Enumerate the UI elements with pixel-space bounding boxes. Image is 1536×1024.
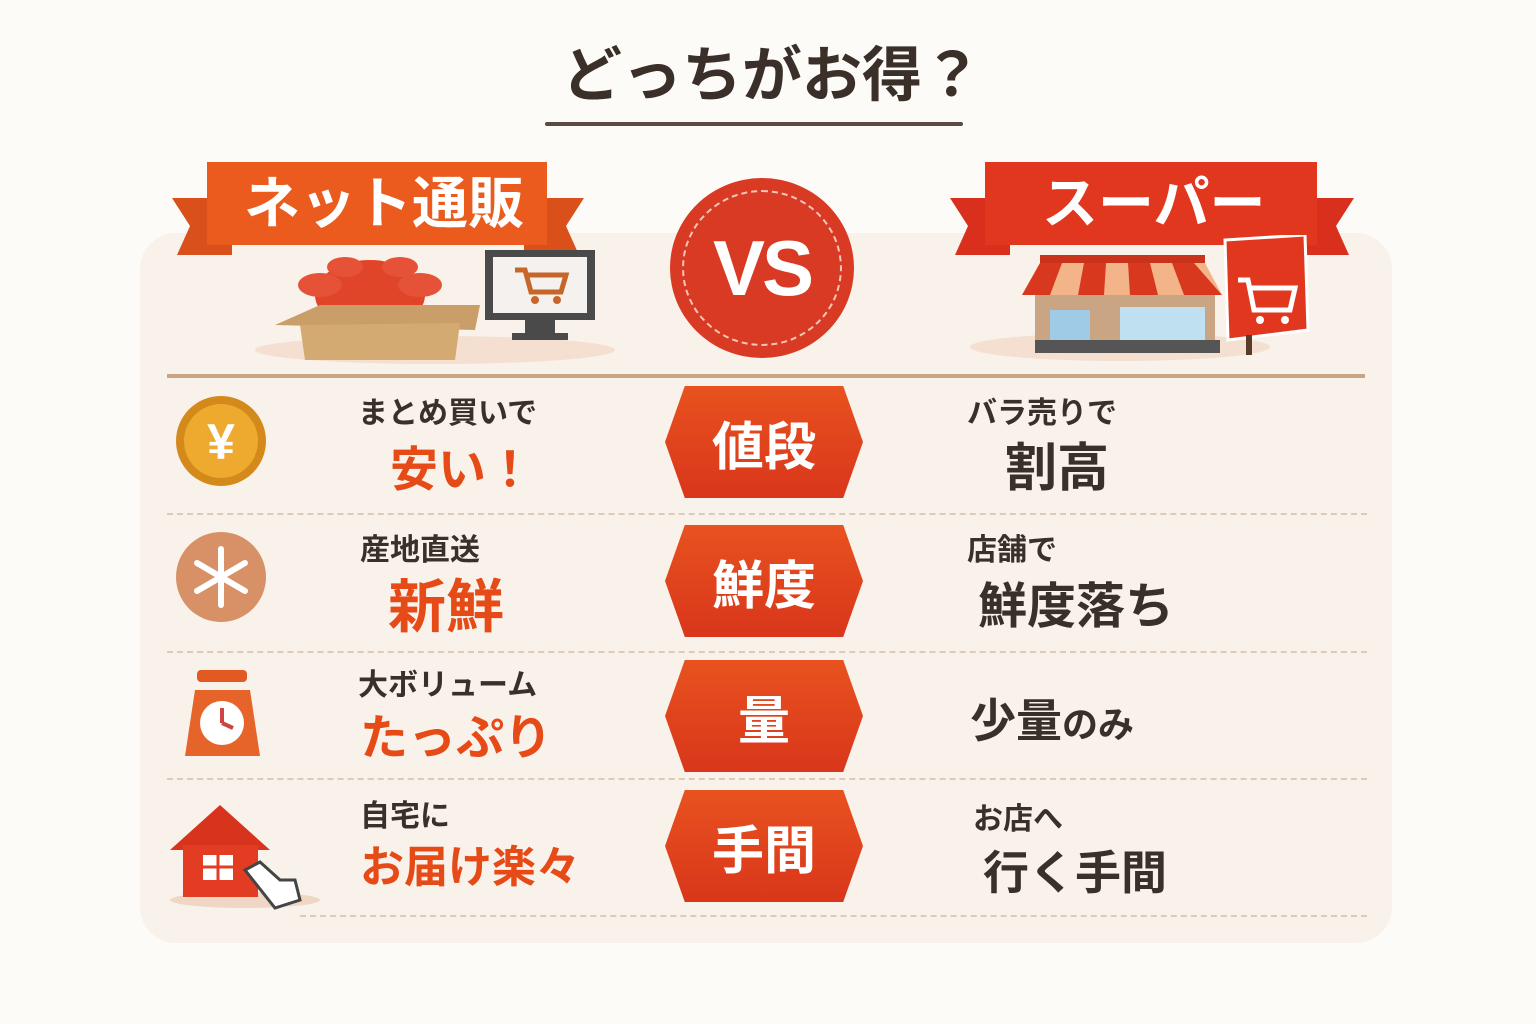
icon: yen coin: ¥ xyxy=(207,414,235,470)
icon: crab in box and computer xyxy=(255,250,615,364)
row: 手間: お届け楽々 xyxy=(360,843,580,892)
icon: scale xyxy=(185,670,260,756)
icon: house with hand xyxy=(170,805,320,910)
banner: ネット通販: ネット通販 xyxy=(244,172,524,235)
icon: VS badge: VS xyxy=(713,224,811,312)
row: 値段: まとめ買いで xyxy=(358,397,537,430)
row: 手間: 行く手間 xyxy=(983,847,1167,899)
row: 値段: バラ売りで xyxy=(967,397,1117,430)
icon: supermarket store xyxy=(970,235,1310,361)
panel: comparison background xyxy=(140,233,1392,943)
badge: 量 xyxy=(665,660,863,772)
banner: スーパー xyxy=(950,162,1354,255)
row: 値段 xyxy=(176,396,1117,498)
badge: 鮮度 xyxy=(665,525,863,637)
badge: 量: 量 xyxy=(738,692,790,750)
badge: 値段: 値段 xyxy=(712,418,816,476)
row: 量: たっぷり xyxy=(360,712,552,765)
banner: スーパー: スーパー xyxy=(1042,172,1265,235)
row: 量 xyxy=(185,669,1134,765)
badge: 手間 xyxy=(665,790,863,902)
row: 鮮度: 店舗で xyxy=(967,534,1057,567)
badge: 鮮度: 鮮度 xyxy=(712,558,816,616)
row: 量: 少量のみ xyxy=(970,695,1134,747)
row: 鮮度 xyxy=(176,532,1174,640)
icon: yen coin xyxy=(176,396,266,486)
row: 鮮度: 新鮮 xyxy=(388,575,504,640)
title: どっちがお得？ xyxy=(562,42,982,109)
icon: snowflake xyxy=(176,532,266,622)
badge: 手間: 手間 xyxy=(712,822,816,880)
row: 量: 大ボリューム xyxy=(358,669,537,702)
icon: VS badge xyxy=(670,178,854,358)
row: 手間 xyxy=(170,800,1167,910)
row: 値段: 安い！ xyxy=(390,444,534,497)
badge: 値段 xyxy=(665,386,863,498)
row: 手間: 自宅に xyxy=(360,800,450,833)
row: 値段: 割高 xyxy=(1005,440,1109,498)
row: 鮮度: 鮮度落ち xyxy=(978,580,1174,634)
row: 手間: お店へ xyxy=(973,803,1063,836)
banner: ネット通販 xyxy=(172,162,584,255)
row: 鮮度: 産地直送 xyxy=(360,534,480,567)
